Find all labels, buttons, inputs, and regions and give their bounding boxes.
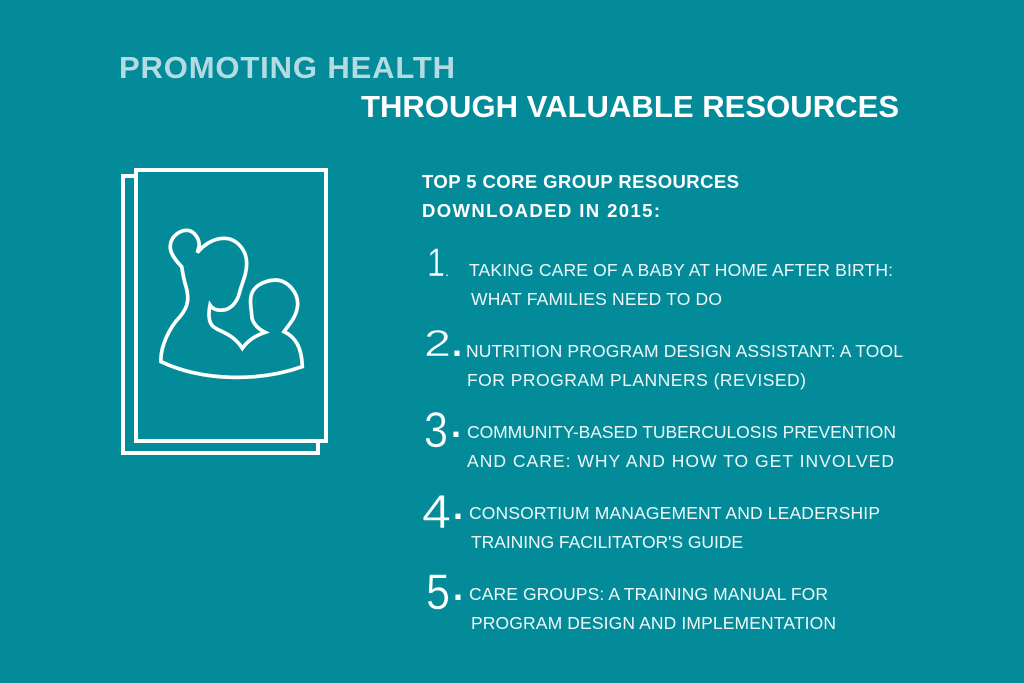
number 3: 3 xyxy=(424,402,448,458)
number 4: 4 xyxy=(422,485,451,538)
heading line 2: DOWNLOADED IN 2015: xyxy=(422,200,660,221)
item 2 text: NUTRITION PROGRAM DESIGN ASSISTANT: A TOOL xyxy=(466,341,903,361)
list item 2 xyxy=(424,323,903,390)
list heading xyxy=(422,171,739,221)
dot 2: . xyxy=(452,323,462,364)
list item 5: PROGRAM DESIGN AND IMPLEMENTATION xyxy=(471,613,836,633)
list item 3 xyxy=(424,402,896,471)
title line 1: PROMOTING HEALTH xyxy=(119,50,455,85)
title xyxy=(119,50,899,124)
item 4 text: CONSORTIUM MANAGEMENT AND LEADERSHIP xyxy=(469,503,880,523)
item 5 text: CARE GROUPS: A TRAINING MANUAL FOR xyxy=(469,584,828,604)
number 5: 5 xyxy=(426,564,450,620)
number 1: 1 xyxy=(427,241,445,285)
item 3 text: COMMUNITY-BASED TUBERCULOSIS PREVENTION xyxy=(467,422,896,442)
icon: document with mother and child xyxy=(123,170,326,453)
list item 4: TRAINING FACILITATOR'S GUIDE xyxy=(471,532,743,552)
dot 4: . xyxy=(453,486,463,527)
list item 5 xyxy=(426,564,836,633)
front page xyxy=(136,170,326,441)
list item 2: FOR PROGRAM PLANNERS (REVISED) xyxy=(467,370,806,390)
heading line 1: TOP 5 CORE GROUP RESOURCES xyxy=(422,171,739,192)
mother and child outline xyxy=(161,230,302,377)
list item 1: WHAT FAMILIES NEED TO DO xyxy=(471,289,722,309)
dot 3: . xyxy=(451,404,461,445)
list item 4 xyxy=(422,485,880,552)
dot 5: . xyxy=(453,567,463,608)
item 1 text: TAKING CARE OF A BABY AT HOME AFTER BIRTH: xyxy=(469,260,893,280)
list item 3: AND CARE: WHY AND HOW TO GET INVOLVED xyxy=(467,451,894,471)
dot 1: . xyxy=(445,265,449,279)
number 2: 2 xyxy=(424,323,451,364)
back page xyxy=(123,176,318,453)
title line 2: THROUGH VALUABLE RESOURCES xyxy=(361,89,899,124)
list item 1 xyxy=(427,241,893,309)
